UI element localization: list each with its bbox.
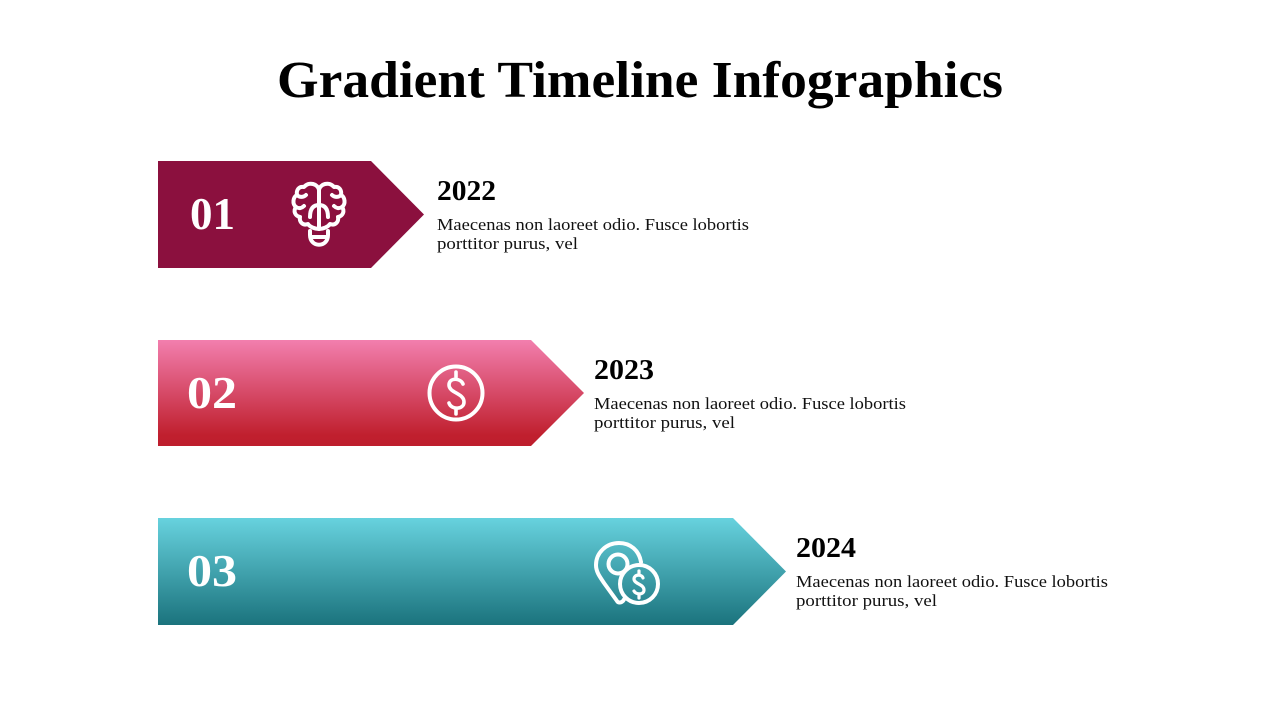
description: step 01: porttitor purus, vel <box>437 234 578 253</box>
panel: step 03 <box>158 518 1108 625</box>
year: 2024: 2024 <box>796 533 856 564</box>
description: step 02 <box>594 394 906 432</box>
year: 2023: 2023 <box>594 355 654 386</box>
arrow: step 02 <box>158 340 584 446</box>
year: 2022: 2022 <box>437 176 496 207</box>
description: step 03: Maecenas non laoreet odio. Fusce lobortis <box>796 572 1108 591</box>
description: step 01 <box>437 215 749 253</box>
panel: step 01 <box>158 161 749 268</box>
number: 03: 03 <box>187 546 237 596</box>
description: step 01: Maecenas non laoreet odio. Fusce lobortis <box>437 215 749 234</box>
icon: brain bulb <box>293 184 345 245</box>
icon: dollar coin <box>430 366 482 420</box>
number: 01: 01 <box>190 189 235 239</box>
arrow: step 01 <box>158 161 424 268</box>
icon: location pin with dollar <box>596 543 658 603</box>
description: step 03 <box>796 572 1108 610</box>
description: step 02: porttitor purus, vel <box>594 413 735 432</box>
description: step 03: porttitor purus, vel <box>796 591 937 610</box>
arrow: step 03 <box>158 518 786 625</box>
description: step 02: Maecenas non laoreet odio. Fusce lobortis <box>594 394 906 413</box>
number: 02: 02 <box>187 368 237 418</box>
title: Gradient Timeline Infographics <box>277 52 1003 109</box>
panel: step 02 <box>158 340 906 446</box>
